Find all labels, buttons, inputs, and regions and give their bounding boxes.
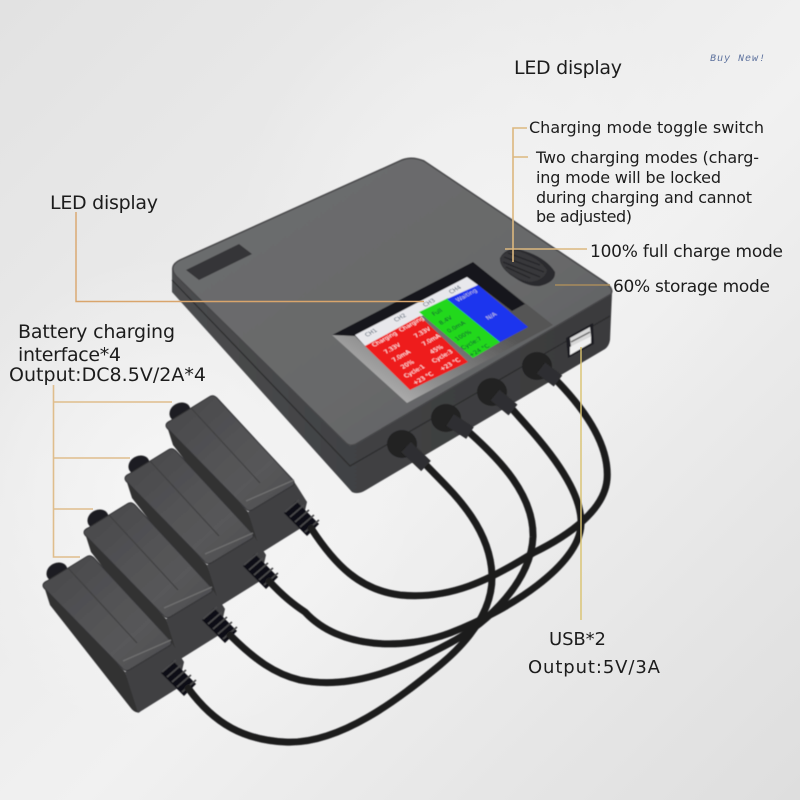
display text: +23 °C bbox=[411, 371, 435, 386]
cables bbox=[188, 368, 607, 742]
display tabs bbox=[355, 277, 478, 347]
label: battery charging interface bbox=[9, 321, 206, 386]
blue panel bbox=[447, 285, 528, 342]
display text: Waiting bbox=[454, 288, 479, 303]
display text: 0.0mA bbox=[445, 320, 468, 334]
display text: CH4 bbox=[447, 284, 463, 295]
text block: two charging modes: ing mode will be locked bbox=[536, 168, 721, 187]
display text: Cycle:7 bbox=[459, 336, 484, 351]
cable 1: port 1 to plug 4 bbox=[188, 466, 492, 742]
display text: 7.0mA bbox=[420, 333, 443, 347]
text block: two charging modes: during charging and cannot bbox=[536, 188, 752, 207]
label: USB output bbox=[528, 629, 661, 678]
parting line on sides bbox=[172, 280, 610, 466]
display text: CH3 bbox=[421, 297, 437, 308]
display text: Charging bbox=[370, 330, 399, 348]
watermark: Buy New!: Buy New! bbox=[710, 54, 765, 65]
display text: N/A bbox=[484, 311, 499, 321]
display bbox=[355, 277, 528, 390]
text block: two charging modes: be adjusted) bbox=[536, 207, 632, 226]
text block: two charging modes bbox=[535, 148, 759, 226]
label: USB output: Output:5V/3A bbox=[528, 657, 661, 678]
display text: 20% bbox=[399, 359, 416, 370]
label: LED display left: LED display bbox=[50, 192, 158, 214]
display text: 7.33V bbox=[382, 342, 403, 355]
screen bezel bbox=[332, 262, 553, 403]
plug 3 bbox=[84, 503, 237, 660]
display text: +24 °C bbox=[467, 343, 491, 358]
label: 60% storage mode: 60% storage mode bbox=[613, 277, 770, 297]
USB ports bbox=[566, 323, 594, 358]
sensor window bbox=[186, 244, 252, 280]
charger body bbox=[172, 158, 612, 493]
charger side faces bbox=[172, 268, 612, 493]
charger top face bbox=[173, 158, 612, 445]
leader: battery interfaces bbox=[54, 385, 172, 557]
port boots bbox=[406, 368, 558, 466]
display text: 100% bbox=[453, 329, 474, 342]
display text: 8.4V bbox=[437, 314, 455, 326]
heading: LED display top: LED display bbox=[514, 57, 622, 79]
red panels bbox=[365, 316, 468, 390]
display text: 45% bbox=[428, 344, 445, 355]
display text: CH2 bbox=[392, 312, 408, 323]
port sockets bbox=[387, 352, 552, 458]
green panel bbox=[419, 298, 500, 358]
label: charging mode toggle switch: Charging mode toggle switch bbox=[529, 118, 764, 137]
leader: 100% mode bbox=[505, 248, 587, 250]
battery plugs bbox=[43, 396, 319, 713]
plug 1 bbox=[166, 396, 319, 553]
leader: charging mode switch bbox=[513, 128, 528, 262]
cable 4: port 4 to plug 1 bbox=[311, 381, 607, 596]
display text: Cycle:3 bbox=[430, 349, 455, 364]
text block: two charging modes: Two charging modes (charg- bbox=[535, 148, 759, 167]
label: 100% full charge mode: 100% full charge mode bbox=[590, 242, 783, 262]
display text: Charging bbox=[397, 315, 426, 333]
display text: Full bbox=[430, 307, 445, 317]
cable 3: port 3 to plug 2 bbox=[269, 410, 581, 644]
display text: 7.33V bbox=[412, 326, 433, 339]
plug 4 bbox=[43, 556, 196, 713]
label: battery charging interface: Battery charging bbox=[18, 321, 175, 343]
display text: +23 °C bbox=[438, 357, 462, 372]
label: battery charging interface: Output:DC8.5V/2A*4 bbox=[9, 364, 206, 386]
display text: CH1 bbox=[363, 327, 379, 338]
toggle switch bbox=[500, 249, 555, 286]
cable 2: port 2 to plug 3 bbox=[230, 433, 533, 683]
leader: USB bbox=[580, 347, 582, 620]
leader: LED display bbox=[76, 212, 424, 302]
display text: 7.0mA bbox=[390, 349, 413, 363]
label: USB output: USB*2 bbox=[549, 629, 606, 650]
display text bbox=[363, 284, 499, 386]
display text: Cycle:1 bbox=[402, 364, 427, 379]
plug 2 bbox=[125, 449, 278, 606]
label: battery charging interface: interface*4 bbox=[18, 344, 121, 366]
leader: 60% mode bbox=[555, 284, 610, 286]
